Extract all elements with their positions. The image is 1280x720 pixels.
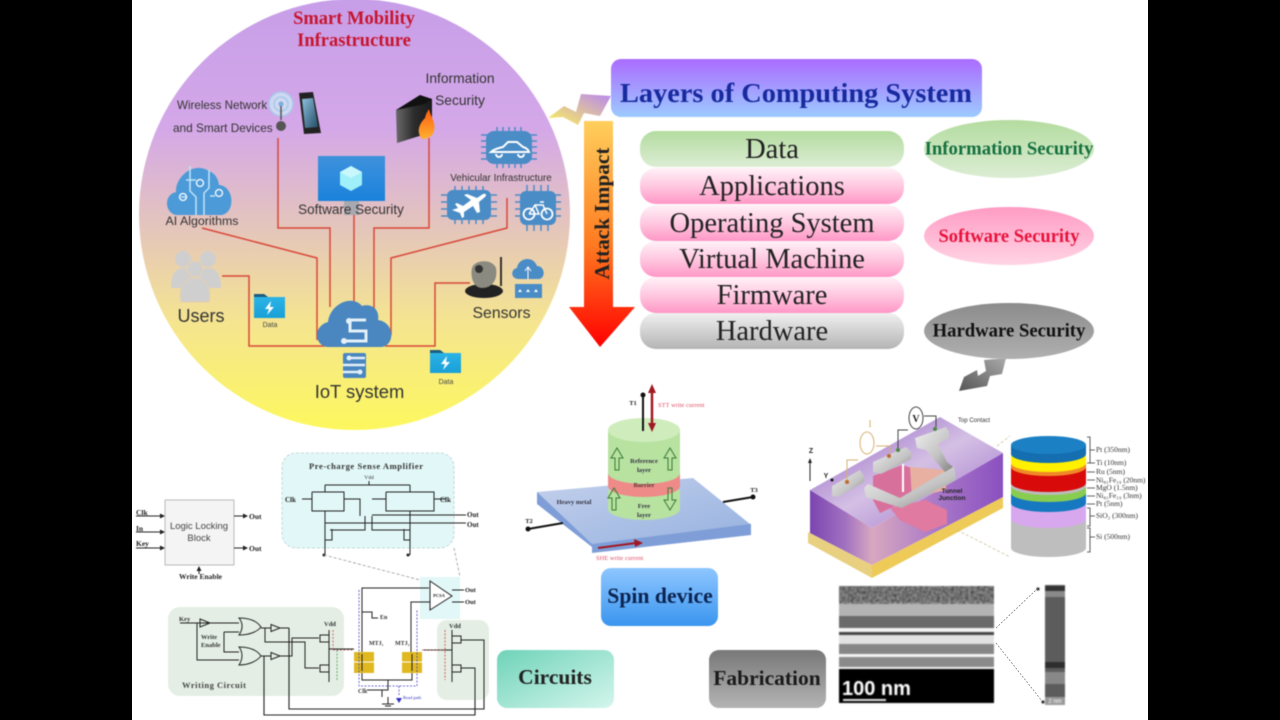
MTJ devices: Read path xyxy=(403,695,422,700)
stack labels: Ru (5nm) xyxy=(1096,467,1125,476)
panel: smart mobility infrastructure xyxy=(139,0,570,430)
current and voltage meters xyxy=(847,407,936,480)
SHE write current arrow xyxy=(596,539,643,562)
stack labels: Pt (350nm) xyxy=(1096,445,1130,454)
writing circuit panel: Writing Circuit xyxy=(182,680,246,690)
icon: plane chip xyxy=(441,186,497,224)
MTJ devices xyxy=(333,588,446,706)
icon: car chip xyxy=(481,127,537,168)
callout: software security xyxy=(924,207,1094,265)
icon: users xyxy=(171,251,221,302)
MTJ cylinder: layer xyxy=(637,467,651,474)
writing circuit panel: Key xyxy=(179,616,191,623)
image: TEM detail strip: 2 nm xyxy=(1048,699,1062,705)
logic locking block: Clk xyxy=(136,508,148,517)
terminal T2: T2 xyxy=(525,518,533,525)
metal electrodes xyxy=(832,427,956,508)
MTJ cylinder xyxy=(608,418,680,520)
label: sensors: Sensors xyxy=(473,305,531,322)
layer: hardware: Hardware xyxy=(716,316,828,347)
MTJ devices: MTJ₂ xyxy=(395,641,410,647)
terminal T3 xyxy=(723,487,759,502)
label: data right: Data xyxy=(439,379,453,386)
logic locking block: Key xyxy=(136,539,149,548)
right driver panel xyxy=(424,620,489,700)
panel: circuits xyxy=(136,453,489,715)
pink junction pillars xyxy=(873,464,947,532)
icon: IoT chip xyxy=(343,353,366,378)
callout: hardware security xyxy=(924,303,1094,359)
connector: lightning bolt to layers title xyxy=(548,94,611,125)
label: information: Information xyxy=(425,71,495,86)
label: users: Users xyxy=(177,306,225,326)
icon: wifi antenna xyxy=(269,92,293,131)
label box: spin device: Spin device xyxy=(607,584,713,608)
label: 100 nm: 100 nm xyxy=(842,678,911,700)
label: I: I xyxy=(868,419,872,429)
label: tunnel junction: Tunnel xyxy=(942,488,963,495)
connector: lightning bolt from hardware security xyxy=(959,358,1006,391)
label: V: V xyxy=(912,414,920,425)
MTJ devices: Clk xyxy=(358,689,368,695)
sense amplifier callout: PCSA xyxy=(433,593,446,598)
MTJ cylinder: layer xyxy=(637,512,651,519)
logic locking block: In xyxy=(136,524,144,533)
layer: data: Data xyxy=(745,134,799,165)
logic locking block: Write Enable xyxy=(179,572,223,581)
title: Smart Mobility xyxy=(293,9,416,29)
sense amplifier callout: Out xyxy=(465,587,477,594)
callout: information security xyxy=(924,120,1094,178)
stack labels: Ti (10nm) xyxy=(1096,458,1127,467)
connection lines xyxy=(202,138,507,346)
layer: virtual machine xyxy=(640,241,904,277)
stack labels: SiO₂ (300nm) xyxy=(1096,511,1138,520)
sense amplifier callout: Out xyxy=(465,599,477,606)
label: top contact: Top Contact xyxy=(958,418,990,424)
layer: applications: Applications xyxy=(699,171,845,202)
logic locking block: Logic Locking xyxy=(170,521,228,532)
label: tunnel junction: Junction xyxy=(938,495,966,502)
icon: data folder right xyxy=(430,350,461,373)
label box: circuits xyxy=(497,650,614,708)
writing circuit panel: Write xyxy=(201,634,217,641)
logic locking block: Out xyxy=(249,544,262,553)
label box: fabrication xyxy=(709,650,826,708)
label: AI algorithms: AI Algorithms xyxy=(166,214,238,228)
contact dots xyxy=(845,427,937,484)
zoom guide: TEM detail xyxy=(996,589,1042,701)
logic locking block xyxy=(136,500,262,581)
logic locking block: Out xyxy=(249,512,262,521)
layer: operating system: Operating System xyxy=(669,208,875,239)
zoom guide lines xyxy=(957,436,1010,557)
pre-charge sense amplifier panel: Out xyxy=(467,511,479,519)
MTJ devices: En xyxy=(380,615,388,621)
stack labels: Si (500nm) xyxy=(1096,532,1130,541)
purple block xyxy=(810,417,1003,565)
stack layers xyxy=(1011,436,1086,557)
label: IoT system: IoT system xyxy=(315,381,404,402)
icon: sensor cloud xyxy=(512,259,544,298)
label box: fabrication: Fabrication xyxy=(713,666,821,690)
right driver panel: Vdd xyxy=(449,623,461,630)
stack labels: Ni₈₁Fe₁₉ (20nm) xyxy=(1096,476,1146,484)
panel: spin device diagram xyxy=(525,384,759,562)
label: tunnel junction xyxy=(938,488,966,502)
title line 2: Infrastructure xyxy=(297,31,411,51)
label box: spin device xyxy=(601,568,718,626)
layer: virtual machine: Virtual Machine xyxy=(679,244,865,275)
MTJ devices: MTJ₁ xyxy=(369,641,384,647)
logic locking block: Block xyxy=(187,533,211,544)
layer: firmware xyxy=(640,277,904,313)
MTJ cylinder: Reference xyxy=(630,458,658,465)
axes: Y xyxy=(824,473,829,480)
stack labels xyxy=(1096,445,1146,541)
callout: information security: Information Security xyxy=(925,138,1094,160)
arrow: attack impact: Attack Impact xyxy=(590,148,614,279)
SHE write current arrow: SHE write current xyxy=(596,555,643,562)
stack brackets xyxy=(1087,437,1095,552)
label box: circuits: Circuits xyxy=(518,665,592,689)
substrate base xyxy=(808,497,1003,578)
layer: firmware: Firmware xyxy=(717,280,827,311)
panel: tunnel junction device xyxy=(808,407,1003,578)
icon: camera xyxy=(465,257,503,298)
pre-charge sense amplifier panel: Clk xyxy=(285,496,296,504)
long control wires xyxy=(264,628,484,715)
writing circuit panel: Enable xyxy=(201,642,221,649)
layer: data xyxy=(640,131,904,167)
layer: operating system xyxy=(640,205,904,241)
sense amplifier callout xyxy=(324,548,477,619)
stack labels: Ni₈₁Fe₁₉ (3nm) xyxy=(1096,491,1142,500)
axes: Z xyxy=(809,448,814,455)
chart: material layer stack xyxy=(957,436,1146,557)
icon: AI cloud xyxy=(167,166,231,215)
label: wireless network: Wireless Network xyxy=(177,99,267,112)
terminal T1 with STT current: STT write current xyxy=(658,402,705,409)
pre-charge sense amplifier panel xyxy=(282,453,479,556)
writing circuit panel: Vdd xyxy=(324,621,336,628)
image: TEM detail strip xyxy=(1036,585,1065,705)
label: vehicular infrastructure: Vehicular Infrastructure xyxy=(450,173,552,184)
heavy metal slab xyxy=(537,478,751,553)
label: security: Security xyxy=(435,93,485,108)
callout: software security: Software Security xyxy=(939,227,1080,247)
pre-charge sense amplifier panel: Clk xyxy=(440,496,451,504)
icon: software monitor xyxy=(318,156,385,215)
axes xyxy=(808,448,834,482)
icon: bicycle chip xyxy=(515,185,561,231)
label: data left: Data xyxy=(263,322,277,329)
layer: applications xyxy=(640,168,904,204)
pre-charge sense amplifier panel: Pre-charge Sense Amplifier xyxy=(309,461,423,471)
arrow: attack impact xyxy=(569,121,635,347)
icon: firewall server xyxy=(396,95,434,143)
terminal T3: T3 xyxy=(750,487,759,494)
panel: system layers xyxy=(640,131,904,349)
circle background xyxy=(139,0,570,430)
heading: layers of computing system xyxy=(611,59,982,117)
writing circuit panel xyxy=(168,607,354,696)
heading: layers of computing system: Layers of Computing System xyxy=(620,78,973,108)
label: software security: Software Security xyxy=(298,202,404,217)
icon: smartphone xyxy=(299,92,321,134)
callout: hardware security: Hardware Security xyxy=(933,320,1086,342)
terminal T1 with STT current: T1 xyxy=(629,400,637,407)
stack labels: MgO (1.5nm) xyxy=(1096,483,1138,492)
icon: data folder left xyxy=(254,294,285,318)
icon: IoT cloud xyxy=(317,301,391,347)
page background xyxy=(132,0,1148,720)
stack labels: Pt (5nm) xyxy=(1096,499,1123,508)
layer: hardware xyxy=(640,313,904,349)
MTJ cylinder: Free xyxy=(638,503,650,510)
label: heavy metal: Heavy metal xyxy=(557,499,592,506)
image: TEM cross-section xyxy=(839,586,994,703)
terminal T1 with STT current xyxy=(629,384,705,432)
pre-charge sense amplifier panel: Vdd xyxy=(364,475,374,481)
label: smart devices: and Smart Devices xyxy=(173,121,273,135)
pre-charge sense amplifier panel: Out xyxy=(467,521,479,529)
terminal T2 xyxy=(525,518,563,532)
MTJ cylinder: Barrier xyxy=(634,482,655,489)
